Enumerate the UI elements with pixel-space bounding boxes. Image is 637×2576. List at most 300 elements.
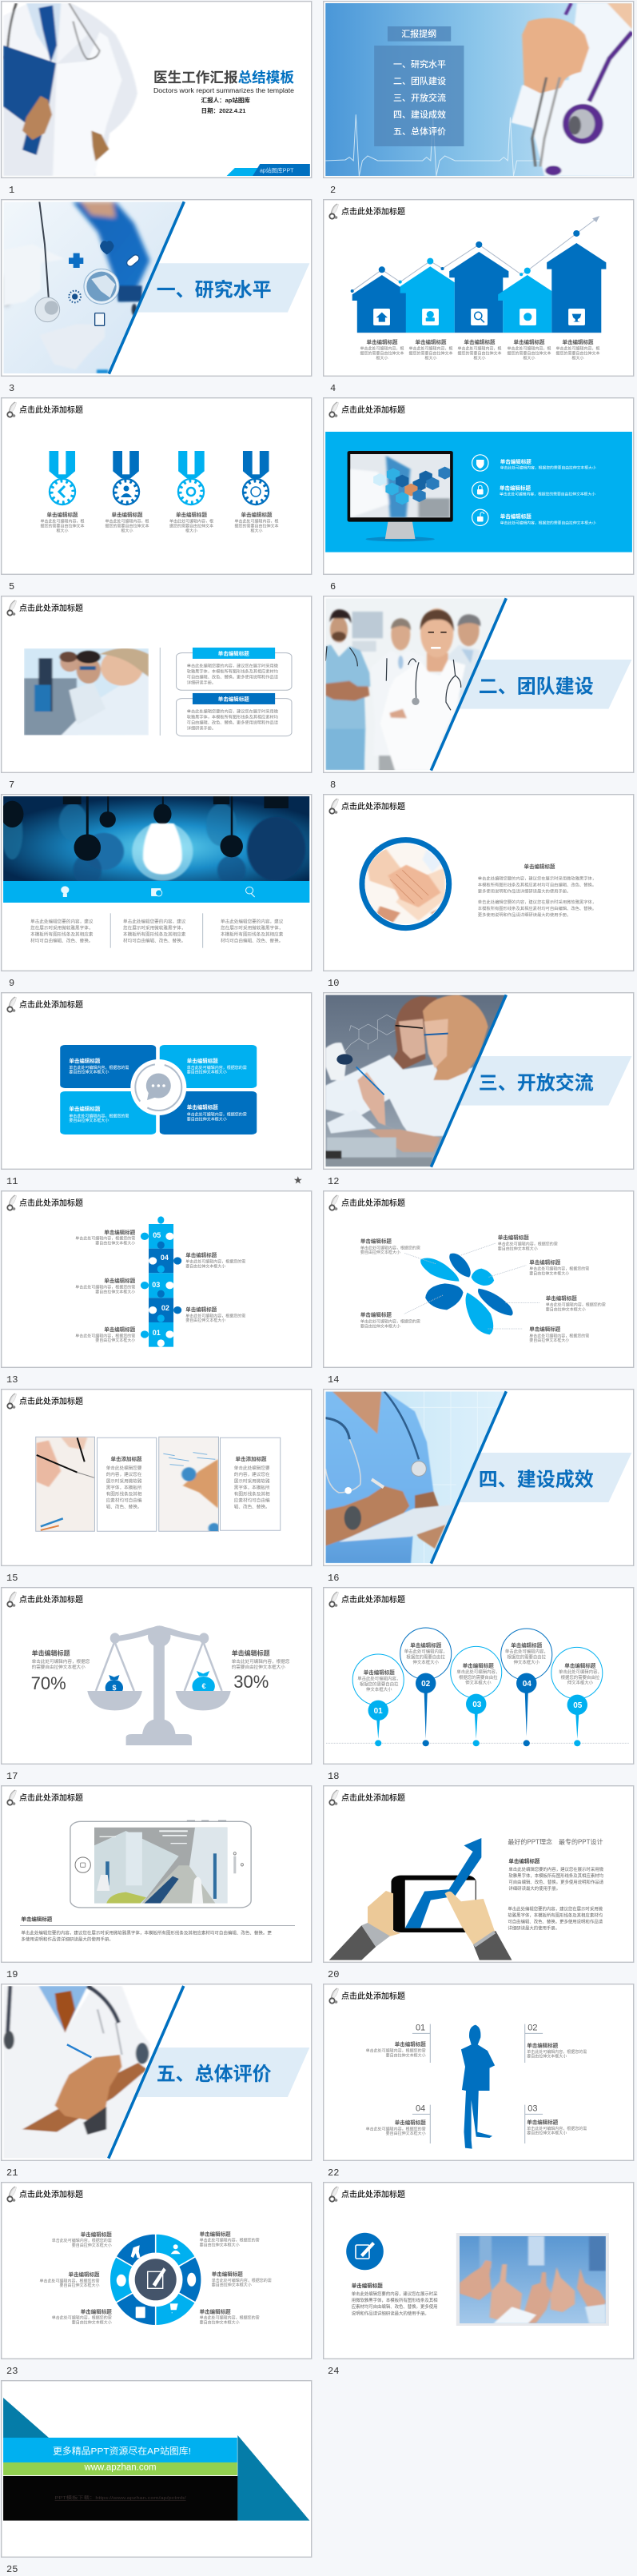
column captions: 单击编辑标题 <box>416 338 447 345</box>
shapes <box>3 2398 309 2521</box>
slide number labels: 6 <box>330 581 336 592</box>
panel text: 要自由拉伸文本框大小 <box>69 1070 109 1075</box>
doctor photo <box>3 3 137 176</box>
petal captions: 要自由拉伸文本框大小 <box>529 1270 569 1276</box>
outline items <box>393 58 446 137</box>
column captions: 单击此处可编辑内容，根 <box>457 345 502 351</box>
arrow houses chart <box>351 216 606 333</box>
box text <box>187 649 279 731</box>
puzzle captions: 要自由拉伸文本框大小 <box>95 1289 135 1294</box>
card text: 有图形线条及其相 <box>106 1490 142 1497</box>
lab photo <box>24 648 149 736</box>
medal captions: 据您的需要自由拉伸文本 <box>169 523 213 529</box>
ring captions: 单击此处可编辑内容，根据您的需 <box>200 2315 260 2320</box>
column captions: 据您的需要自由拉伸文本 <box>408 350 453 356</box>
slide number labels: 21 <box>6 2167 18 2179</box>
petal captions: 单击编辑标题 <box>529 1258 561 1266</box>
header icon and title <box>7 1592 83 1607</box>
currency marks: $ <box>112 1684 117 1692</box>
column captions: 据您的需要自由拉伸文本 <box>555 350 600 356</box>
column captions: 框大小 <box>523 355 535 361</box>
column captions: 框大小 <box>571 355 584 361</box>
column captions: 框大小 <box>376 355 388 361</box>
note text: 02 <box>528 2023 538 2032</box>
right text block: 单击编辑标题 <box>524 863 555 870</box>
star mark: ★ <box>293 1175 303 1186</box>
reporter and date: 汇报人：ap站图库 <box>201 96 250 104</box>
header icon and title <box>7 2187 83 2202</box>
ring captions: 要自由拉伸文本框大小 <box>212 2283 252 2288</box>
panel text: 单击此处可编辑内容，根据您的需 <box>69 1065 129 1071</box>
ring captions: 要自由拉伸文本框大小 <box>200 2319 240 2325</box>
header icon and title <box>329 1790 405 1805</box>
column captions: 框大小 <box>424 355 437 361</box>
note text: 单击此处可编辑内容，根据您的需 <box>527 2126 587 2131</box>
column dividers <box>110 913 203 948</box>
bubble text: 单击此处可编辑内容， <box>456 1669 500 1675</box>
closing headline: 更多精品PPT资源尽在AP站图库! <box>53 2445 191 2456</box>
card text <box>106 1455 270 1509</box>
body text <box>508 1857 604 1931</box>
outline heading: 汇报提纲 <box>401 28 436 39</box>
header icon and title <box>7 997 83 1012</box>
slide 3: section one <box>1 199 309 377</box>
left caption: 的需要自由拉伸文本框大小 <box>32 1664 86 1670</box>
medal captions <box>40 511 279 534</box>
card text: 单击添加标题 <box>110 1455 142 1462</box>
phone with corridor photo <box>70 1820 251 1908</box>
panel text: 单击此处可编辑内容，根据您的需 <box>187 1111 247 1117</box>
left caption: 单击编辑标题 <box>32 1649 70 1657</box>
medal captions: 单击此处可编辑内容，根 <box>40 518 85 524</box>
card text: 黑字体，本模板所 <box>234 1484 270 1490</box>
card text: 应素材均可自由编 <box>234 1497 270 1503</box>
slide 7: lab photo with text boxes <box>7 600 292 736</box>
note brackets <box>412 2024 543 2143</box>
corner banner <box>227 164 310 176</box>
reporter and date <box>201 96 250 114</box>
right text block: 单击此处编辑您要的内容，建议您在展示时采用微软雅黑字体， <box>478 875 596 881</box>
panel text: 单击此处可编辑内容，根据您的需 <box>69 1113 129 1119</box>
box text: 单击此处编辑您要的内容，建议您在展示时采用微 <box>187 708 279 714</box>
petal captions: 要自由拉伸文本框大小 <box>498 1246 538 1251</box>
right text block <box>478 863 596 918</box>
left caption: 70% <box>31 1673 66 1693</box>
slide number labels: 3 <box>9 383 14 394</box>
slide number labels: 20 <box>328 1969 339 1980</box>
body text: 单击编辑标题 <box>508 1857 540 1864</box>
slide 23: ring diagram <box>7 2187 272 2326</box>
bubble text: 单击此处可编辑内容， <box>505 1649 548 1655</box>
medal captions: 框大小 <box>56 528 69 534</box>
bubble text: 单击此处可编辑内容， <box>357 1675 400 1681</box>
ring captions: 单击此处可编辑内容，根据您的需 <box>200 2238 260 2243</box>
slide 2: contents <box>325 3 632 176</box>
column captions: 单击编辑标题 <box>513 338 545 345</box>
header icon and title <box>329 2187 405 2202</box>
text block: 应素材均可自由编辑、改色、替换。更多使用 <box>352 2303 438 2310</box>
slide 10: teamwork circle <box>329 799 596 928</box>
slide number labels: 9 <box>9 978 14 989</box>
slide number labels: 22 <box>328 2167 339 2179</box>
right caption: 的需要自由拉伸文本框大小 <box>232 1664 285 1670</box>
scale graphic <box>87 1625 231 1745</box>
slide number labels: 17 <box>6 1771 18 1782</box>
ring captions: 单击编辑标题 <box>81 2307 112 2315</box>
column text: 本模板所有图形线条及其相应素 <box>123 931 186 937</box>
medal captions: 单击编辑标题 <box>46 511 78 518</box>
headline: 最好的PPT理念 最专的PPT设计 <box>508 1838 603 1846</box>
puzzle numbers <box>152 1231 169 1337</box>
card text: 的内容，建议您在 <box>106 1471 142 1477</box>
medal captions: 框大小 <box>185 528 197 534</box>
bubble text: 伸文本框大小 <box>567 1680 594 1686</box>
ring captions: 单击编辑标题 <box>81 2231 112 2238</box>
note text: 01 <box>416 2023 425 2032</box>
body text: 单击此处编辑您要的内容，建议您在展示时采用微 <box>508 1866 604 1872</box>
note text <box>366 2023 587 2136</box>
body text: 软雅黑字体，本模板所有图形线条及其相应素材均 <box>508 1912 603 1918</box>
bulb photo <box>1 796 309 886</box>
petal captions: 要自由拉伸文本框大小 <box>546 1306 586 1312</box>
download link text: PPT模板下载：https://www.apzhan.com/ap/pctmb/ <box>55 2494 186 2501</box>
bubble text: 伸文本框大小 <box>413 1659 439 1665</box>
panel text: 要自由拉伸文本框大小 <box>187 1116 227 1122</box>
header icon and title <box>329 1195 405 1210</box>
ring captions: 单击此处可编辑内容，根据您的需 <box>52 2238 112 2243</box>
timeline numbers: 03 <box>472 1701 482 1709</box>
petal captions: 单击此处可编辑内容，根据您的需 <box>546 1302 606 1308</box>
ring captions: 单击此处可编辑内容，根据您的需 <box>39 2278 99 2283</box>
column captions: 单击此处可编辑内容，根 <box>507 345 551 351</box>
slide number labels: 13 <box>6 1374 18 1386</box>
medal captions: 单击此处可编辑内容，根 <box>169 518 213 524</box>
medal captions: 据您的需要自由拉伸文本 <box>234 523 279 529</box>
panel text: 要自由拉伸文本框大小 <box>69 1118 109 1123</box>
puzzle captions: 单击此处可编辑内容，根据您的需 <box>185 1313 245 1318</box>
body text: 单击此处编辑您要的内容，建议您在展示时采用微 <box>508 1905 603 1912</box>
note text: 单击此处可编辑内容，根据您的需 <box>366 2048 426 2054</box>
note text: 03 <box>528 2103 538 2113</box>
puzzle captions: 单击编辑标题 <box>104 1277 136 1284</box>
blue band <box>325 432 632 552</box>
card text: 单击此处编辑您要 <box>234 1465 270 1471</box>
note text: 要自由拉伸文本框大小 <box>527 2131 567 2136</box>
feature list: 单击编辑标题 <box>500 484 531 491</box>
person silhouette <box>461 2025 495 2149</box>
medal captions: 据您的需要自由拉伸文本 <box>40 523 85 529</box>
english subtitle: Doctors work report summarizes the template <box>153 87 295 94</box>
monitor <box>348 451 453 541</box>
timeline numbers <box>374 1680 583 1716</box>
header icon and title <box>7 1790 83 1805</box>
outline items: 二、团队建设 <box>393 75 446 86</box>
feature list: 单击此处可编辑内容，根据您的需要自由拉伸文本框大小 <box>500 492 595 497</box>
section banner shape <box>136 263 309 313</box>
ring captions: 要自由拉伸文本框大小 <box>72 2243 112 2248</box>
card text: 辑、改色、替换。 <box>106 1503 141 1509</box>
caption: 单击编辑标题 <box>21 1916 53 1922</box>
panel text: 单击编辑标题 <box>187 1057 218 1064</box>
column captions: 单击编辑标题 <box>366 338 398 345</box>
slide number labels: 24 <box>328 2366 339 2377</box>
right caption: 30% <box>233 1672 269 1692</box>
petal captions <box>360 1234 606 1343</box>
header icon and title: 点击此处添加标题 <box>19 1594 83 1605</box>
slide number labels: 12 <box>328 1176 339 1187</box>
box text: 软雅黑字体，本模板所有图形线条及其相应素材均 <box>187 668 278 675</box>
header icon and title <box>329 799 405 814</box>
medal captions: 单击编辑标题 <box>176 511 208 518</box>
ring captions: 单击编辑标题 <box>200 2307 231 2315</box>
slide number labels <box>6 185 339 2575</box>
note text: 单击此处可编辑内容，根据您的需 <box>366 2126 426 2131</box>
section banner shape <box>136 2048 309 2097</box>
box text: 详细研读手册。 <box>187 679 216 685</box>
section title: 一、研究水平 <box>157 279 272 301</box>
puzzle column <box>141 1216 181 1347</box>
currency marks: € <box>201 1682 206 1690</box>
four colored panels <box>60 1045 257 1134</box>
thumbs photo <box>456 2233 609 2326</box>
bubble text: 单击编辑标题 <box>364 1669 395 1676</box>
puzzle captions: 单击编辑标题 <box>185 1251 217 1258</box>
puzzle captions: 单击此处可编辑内容，根据您的需 <box>75 1333 135 1338</box>
outline items: 三、开放交流 <box>393 92 446 103</box>
doctor clipboard photo <box>0 1984 187 2160</box>
header icon and title <box>7 1394 83 1409</box>
bubble text <box>357 1641 602 1693</box>
ring captions: 要自由拉伸文本框大小 <box>59 2283 99 2288</box>
caption: 多使用说明和作品请详细研读最大的使用手册。 <box>21 1936 113 1943</box>
petal chart <box>404 1243 539 1334</box>
petal captions: 单击编辑标题 <box>360 1311 392 1318</box>
feature list <box>472 455 596 526</box>
puzzle captions: 单击此处可编辑内容，根据您的需 <box>75 1284 135 1290</box>
slide number labels: 1 <box>9 185 14 196</box>
box text: 单击此处编辑您要的内容，建议您在展示时采用微 <box>187 663 279 669</box>
column text: 您在展示时采用微软雅黑字体， <box>221 924 283 931</box>
box text: 单击编辑标题 <box>218 649 249 657</box>
tablet and hands <box>329 1838 512 1960</box>
section title: 二、团队建设 <box>479 676 594 697</box>
note text: 04 <box>416 2103 425 2113</box>
medal captions: 据您的需要自由拉伸文本 <box>105 523 149 529</box>
column text: 材均可自由编辑、改色、替换。 <box>221 937 283 943</box>
slide 22: silhouette with four notes <box>329 1988 587 2149</box>
left caption: 单击此处可编辑内容，根据您 <box>32 1658 90 1665</box>
column text: 本模板所有图形线条及其相应素 <box>221 931 284 937</box>
body text: 可自由编辑、改色、替换。更多使用说明和作品请 <box>508 1879 604 1885</box>
column captions: 据您的需要自由拉伸文本 <box>360 350 404 356</box>
slide 25: closing banner <box>3 2398 309 2521</box>
column text <box>30 918 284 943</box>
bubble text: 单击编辑标题 <box>511 1641 543 1649</box>
column text: 材均可自由编辑、改色、替换。 <box>123 937 185 943</box>
slide 6: monitor band <box>325 402 632 552</box>
slide number labels: 14 <box>328 1374 339 1386</box>
header icon and title: 点击此处添加标题 <box>341 801 405 811</box>
hands circle photo <box>361 840 451 928</box>
text block: 单击此处编辑您要的内容，建议您在展示时采 <box>352 2291 438 2297</box>
icon bar <box>3 881 309 903</box>
card text: 应素材均可自由编 <box>106 1497 142 1503</box>
header icon and title <box>329 1592 405 1607</box>
slide 12: section three <box>323 992 631 1170</box>
petal captions: 要自由拉伸文本框大小 <box>360 1250 400 1255</box>
text block <box>352 2282 438 2316</box>
team photo <box>323 596 509 774</box>
header icon and title: 点击此处添加标题 <box>341 206 405 217</box>
column captions: 单击此处可编辑内容，根 <box>555 345 600 351</box>
slide 20: tablet chart illustration <box>329 1790 604 1960</box>
panel text: 单击此处可编辑内容，根据您的需 <box>187 1065 247 1071</box>
petal captions: 单击此处可编辑内容，根据您的需 <box>360 1318 420 1324</box>
bubble text: 单击此处可编辑内容， <box>559 1669 602 1675</box>
note text: 单击此处可编辑内容，根据您的需 <box>527 2049 587 2055</box>
section banner shape <box>459 1453 631 1502</box>
box text: 软雅黑字体，本模板所有图形线条及其相应素材均 <box>187 713 278 720</box>
slide number labels: 16 <box>328 1573 339 1584</box>
feature list: 单击编辑标题 <box>500 512 531 520</box>
slide number labels: 23 <box>6 2366 18 2377</box>
header icon and title: 点击此处添加标题 <box>341 1792 405 1803</box>
petal captions: 要自由拉伸文本框大小 <box>360 1323 400 1329</box>
text block: 说明和作品请详细研读最大的使用手册。 <box>352 2310 429 2316</box>
bubble text: 根据您的需要自由拉 <box>561 1674 600 1681</box>
right caption: 单击此处可编辑内容，根据您 <box>232 1658 290 1665</box>
puzzle numbers: 03 <box>152 1281 160 1289</box>
slide 19: phone mockup <box>7 1790 295 1943</box>
corner banner: ap站图库PPT <box>260 166 294 174</box>
box text: 单击编辑标题 <box>218 696 249 702</box>
header icon and title <box>329 1988 405 2004</box>
divider and text boxes <box>160 648 292 736</box>
header icon and title: 点击此处添加标题 <box>19 405 83 415</box>
lab women photo <box>323 992 509 1170</box>
puzzle captions: 要自由拉伸文本框大小 <box>95 1338 135 1343</box>
outline items: 一、研究水平 <box>393 58 446 70</box>
petal captions: 单击编辑标题 <box>529 1326 561 1332</box>
column text: 单击此处编辑您要的内容，建议 <box>123 918 186 924</box>
outline items: 五、总体评价 <box>393 126 446 137</box>
slide 24: thumbs up <box>329 2187 609 2326</box>
body text: 详细研读最大的使用手册。 <box>508 1924 559 1931</box>
column text: 单击此处编辑您要的内容，建议 <box>221 918 284 924</box>
edit icon circle <box>346 2233 384 2270</box>
puzzle numbers: 05 <box>153 1231 161 1239</box>
panel text: 单击编辑标题 <box>187 1103 218 1111</box>
header icon and title: 点击此处添加标题 <box>341 2189 405 2199</box>
puzzle captions: 要自由拉伸文本框大小 <box>95 1241 135 1246</box>
slide 11: four panels <box>7 997 257 1134</box>
left caption <box>31 1649 90 1693</box>
header icon and title <box>7 402 83 417</box>
card text: 有图形线条及其相 <box>234 1490 270 1497</box>
slide number labels: 2 <box>330 185 336 196</box>
slide number labels: 25 <box>6 2564 18 2575</box>
slide number labels: 15 <box>6 1573 18 1584</box>
box text: 可自由编辑、改色、替换。更多使用说明和作品请 <box>187 719 278 725</box>
center chat icon <box>130 1059 186 1115</box>
section banner shape <box>459 660 631 709</box>
petal captions: 单击编辑标题 <box>546 1294 577 1302</box>
feature list: 单击此处可编辑内容，根据您的需要自由拉伸文本框大小 <box>500 465 596 471</box>
header icon and title <box>7 600 83 616</box>
slide 13: puzzle timeline <box>7 1195 245 1347</box>
column captions: 据您的需要自由拉伸文本 <box>457 350 502 356</box>
puzzle numbers: 04 <box>161 1254 169 1262</box>
bubble text: 根据您的需要自由拉 <box>508 1653 547 1660</box>
slide 17: balance scale <box>7 1592 290 1745</box>
reporter and date: 日期：2022.4.21 <box>201 106 245 114</box>
bubble text: 伸文本框大小 <box>465 1680 492 1686</box>
column captions: 单击此处可编辑内容，根 <box>408 345 453 351</box>
medal ribbons <box>50 451 269 478</box>
petal captions: 要自由拉伸文本框大小 <box>529 1338 569 1343</box>
panel text: 要自由拉伸文本框大小 <box>187 1070 227 1075</box>
slide number labels: 4 <box>330 383 336 394</box>
timeline numbers: 01 <box>374 1707 383 1716</box>
currency marks <box>112 1682 206 1692</box>
puzzle captions: 单击此处可编辑内容，根据您的需 <box>185 1259 245 1265</box>
body text: 软雅黑字体，本模板所有图形线条及其相应素材均 <box>508 1872 603 1879</box>
timeline numbers: 04 <box>523 1680 531 1689</box>
card text: 黑字体，本模板所 <box>106 1484 142 1490</box>
header icon and title: 点击此处添加标题 <box>341 1594 405 1605</box>
puzzle captions: 单击编辑标题 <box>185 1306 217 1313</box>
right text block: 本模板所有图形线条及其相应素材均可自由编辑、改色、替换。 <box>478 905 596 911</box>
ring captions: 单击编辑标题 <box>200 2231 231 2237</box>
right text block: 更多使用说明和作品请详细研读最大的使用手册。 <box>478 911 571 918</box>
slide 14: petals <box>329 1195 606 1343</box>
card text: 展示时采用微软雅 <box>234 1477 270 1484</box>
note text: 单击编辑标题 <box>527 2119 559 2125</box>
column captions: 单击编辑标题 <box>464 338 496 345</box>
card text: 的内容，建议您在 <box>234 1471 270 1477</box>
ring captions: 单击此处可编辑内容，根据您的需 <box>52 2315 112 2321</box>
puzzle numbers: 02 <box>161 1304 169 1312</box>
header icon and title: 点击此处添加标题 <box>19 1198 83 1208</box>
header icon and title <box>329 204 405 219</box>
header icon and title: 点击此处添加标题 <box>341 1991 405 2001</box>
bubble text: 单击编辑标题 <box>564 1661 596 1669</box>
outline items: 四、建设成效 <box>393 109 446 120</box>
panel text <box>69 1057 247 1123</box>
medal captions: 单击此处可编辑内容，根 <box>105 518 149 524</box>
background photo <box>325 3 632 176</box>
petal captions: 单击编辑标题 <box>498 1234 529 1241</box>
feature list: 单击此处可编辑内容，根据您的需要自由拉伸文本框大小 <box>500 520 596 525</box>
segmented ring <box>109 2234 201 2326</box>
column captions: 据您的需要自由拉伸文本 <box>507 350 551 356</box>
column captions: 单击编辑标题 <box>563 338 594 345</box>
slide number labels: 8 <box>330 780 336 791</box>
header icon and title: 点击此处添加标题 <box>341 405 405 415</box>
section photo <box>1 199 187 377</box>
section title: 四、建设成效 <box>479 1469 594 1490</box>
main title: 医生工作汇报总结模板 <box>153 70 294 86</box>
card row <box>36 1437 281 1533</box>
section banner shape <box>459 1056 631 1106</box>
timeline graphic <box>326 1628 629 1746</box>
timeline numbers: 02 <box>421 1680 431 1689</box>
bubble text: 伸文本框大小 <box>366 1686 392 1693</box>
slide 15: photo and text cards <box>7 1394 281 1533</box>
ring captions: 要自由拉伸文本框大小 <box>200 2242 240 2247</box>
box text: 详细研读手册。 <box>187 724 216 731</box>
slide 18: pin timeline <box>326 1592 629 1746</box>
